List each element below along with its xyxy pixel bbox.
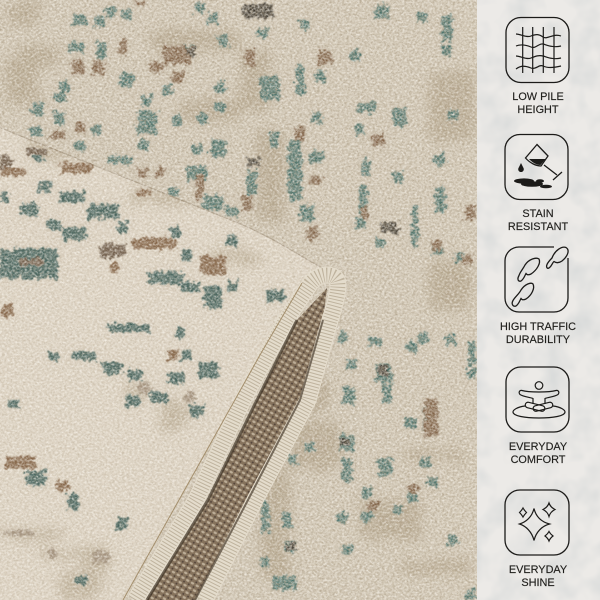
label: everyday comfort <box>509 441 567 466</box>
floor rug teal flecks <box>30 2 476 600</box>
label: stain resistant: RESISTANT <box>508 221 568 233</box>
fold crease shading <box>0 127 333 273</box>
folded rug fleck halos <box>36 248 204 293</box>
icon: low pile height <box>506 18 569 82</box>
floor rug fleck halos <box>30 0 476 600</box>
label: high traffic durability: HIGH TRAFFIC <box>500 321 576 333</box>
icon: everyday shine <box>505 490 569 555</box>
label: everyday shine: SHINE <box>521 577 555 589</box>
icon: stain resistant <box>505 134 568 200</box>
folded rug teal and grey flecks <box>0 150 284 584</box>
backing shadow line <box>147 320 297 600</box>
label: everyday comfort: EVERYDAY <box>509 441 567 453</box>
label: everyday shine <box>509 564 567 589</box>
side panel background <box>477 0 600 600</box>
stitching line <box>123 283 302 600</box>
label: high traffic durability: DURABILITY <box>506 334 570 346</box>
label: everyday comfort: COMFORT <box>511 454 565 466</box>
label: high traffic durability <box>500 321 576 346</box>
folded rug smudges <box>0 135 260 600</box>
label: everyday shine: EVERYDAY <box>509 564 567 576</box>
icon: everyday comfort <box>506 367 569 432</box>
icon: high traffic durability <box>505 247 568 312</box>
label: low pile height: HEIGHT <box>517 104 559 116</box>
label: stain resistant <box>508 208 568 233</box>
label: low pile height: LOW PILE <box>512 91 564 103</box>
label: stain resistant: STAIN <box>522 208 554 220</box>
floor rug surface <box>0 0 480 600</box>
rug underside backing <box>147 288 327 600</box>
rug binding edge <box>123 275 338 600</box>
floor rug brown flecks <box>50 0 475 551</box>
folded rug brown flecks <box>0 148 226 563</box>
floor rug tan smudges <box>5 0 475 580</box>
folded rug corner <box>0 127 322 600</box>
label: low pile height <box>512 91 564 116</box>
